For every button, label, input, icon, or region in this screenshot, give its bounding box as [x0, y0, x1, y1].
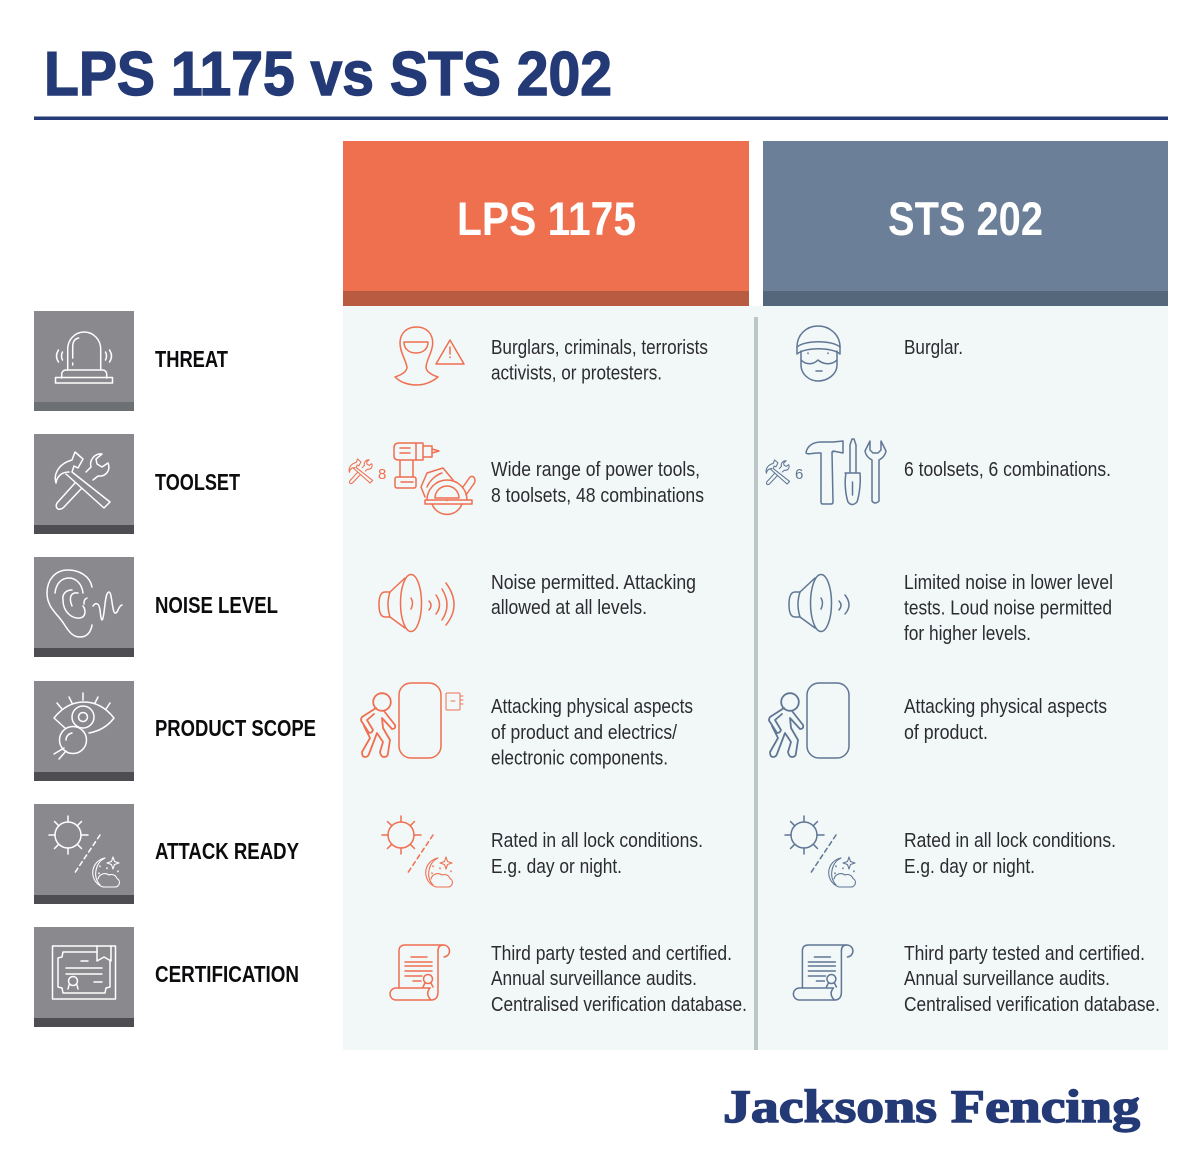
- LPS toolset text: 8 toolsets, 48 combinations: [491, 484, 704, 507]
- LPS certification text: [491, 942, 747, 1016]
- row label: certification: [34, 927, 299, 1027]
- STS certification text: Third party tested and certified.: [904, 942, 1145, 965]
- LPS threat text: activists, or protesters.: [491, 362, 662, 385]
- row label: threat: [34, 311, 228, 411]
- LPS toolset: toolset count icon: 8: [378, 466, 386, 483]
- row label: toolset: [34, 434, 240, 534]
- STS toolset text: 6 toolsets, 6 combinations.: [904, 458, 1111, 481]
- LPS certification text: Centralised verification database.: [491, 993, 747, 1016]
- LPS toolset text: [491, 458, 704, 507]
- icon: ear and sound wave: [47, 570, 122, 637]
- LPS attack ready text: Rated in all lock conditions.: [491, 829, 703, 852]
- LPS certification text: Third party tested and certified.: [491, 942, 732, 965]
- column header: LPS 1175: [343, 141, 749, 306]
- STS noise text: Limited noise in lower level: [904, 571, 1113, 594]
- icon: alarm light: [56, 332, 112, 383]
- column header: STS 202: STS 202: [888, 192, 1043, 245]
- STS toolset: hammer, screwdriver and wrench icons: [806, 439, 886, 504]
- LPS noise: loud speaker icon: [379, 574, 454, 632]
- STS noise text: tests. Loud noise permitted: [904, 597, 1112, 620]
- comparison panel background: [343, 306, 1168, 1050]
- STS noise text: [904, 571, 1113, 645]
- LPS toolset: toolset count icon: [349, 459, 386, 484]
- icon: eye and magnifier: [54, 693, 114, 759]
- STS scope text: of product.: [904, 721, 988, 744]
- row label: product scope: PRODUCT SCOPE: [155, 715, 316, 741]
- icon: certificate: [52, 946, 116, 999]
- row label: attack ready: ATTACK READY: [155, 838, 299, 864]
- LPS scope: person, door and electronics icon: [361, 683, 463, 758]
- column header: STS 202: [763, 141, 1168, 306]
- LPS certification: scroll icon: [390, 945, 450, 1000]
- row label: product scope: [34, 681, 316, 781]
- row label: certification: CERTIFICATION: [155, 961, 299, 987]
- LPS scope text: Attacking physical aspects: [491, 695, 693, 718]
- LPS toolset: drill icon: [394, 443, 439, 488]
- row label: attack ready: [34, 804, 299, 904]
- LPS attack ready: sun and moon icon: [382, 816, 452, 887]
- STS certification text: Annual surveillance audits.: [904, 967, 1110, 990]
- row label: noise level: NOISE LEVEL: [155, 592, 278, 618]
- STS noise text: for higher levels.: [904, 622, 1031, 645]
- STS attack ready text: Rated in all lock conditions.: [904, 829, 1116, 852]
- icon: sun and moon: [49, 816, 119, 887]
- STS attack ready text: [904, 829, 1116, 878]
- column header: LPS 1175: LPS 1175: [457, 192, 636, 245]
- LPS toolset text: Wide range of power tools,: [491, 458, 700, 481]
- LPS noise text: allowed at all levels.: [491, 596, 647, 619]
- STS certification text: Centralised verification database.: [904, 993, 1160, 1016]
- STS attack ready: sun and moon icon: [785, 816, 855, 887]
- LPS noise text: [491, 571, 696, 619]
- row label: threat: THREAT: [155, 346, 228, 372]
- logo: Jacksons Fencing: Jacksons Fencing: [723, 1081, 1141, 1133]
- LPS scope text: electronic components.: [491, 747, 668, 770]
- LPS scope text: [491, 695, 693, 770]
- STS noise: quiet speaker icon: [789, 574, 849, 632]
- STS toolset: toolset count icon: 6: [795, 466, 803, 483]
- STS attack ready text: E.g. day or night.: [904, 855, 1035, 878]
- column divider: [754, 317, 758, 1050]
- STS threat: burglar with goggles icon: [797, 326, 840, 381]
- title rule: [34, 116, 1168, 120]
- STS certification: scroll icon: [793, 945, 853, 1000]
- STS threat text: Burglar.: [904, 336, 963, 359]
- STS scope text: [904, 695, 1107, 744]
- STS toolset: toolset count icon: [766, 460, 803, 485]
- LPS threat text: Burglars, criminals, terrorists: [491, 336, 708, 359]
- row label: noise level: [34, 557, 278, 657]
- LPS threat text: [491, 336, 708, 385]
- LPS toolset: circular saw icon: [421, 468, 475, 514]
- LPS attack ready text: E.g. day or night.: [491, 855, 622, 878]
- icon: hammer and wrench: [55, 452, 110, 509]
- row label: toolset: TOOLSET: [155, 469, 240, 495]
- STS certification text: [904, 942, 1160, 1016]
- LPS certification text: Annual surveillance audits.: [491, 967, 697, 990]
- STS scope text: Attacking physical aspects: [904, 695, 1107, 718]
- LPS noise text: Noise permitted. Attacking: [491, 571, 696, 594]
- LPS scope text: of product and electrics/: [491, 721, 677, 744]
- LPS attack ready text: [491, 829, 703, 878]
- title: LPS 1175 vs STS 202: [44, 40, 612, 109]
- LPS threat: balaclava and warning icon: [395, 327, 464, 385]
- STS scope: person and door icon: [769, 683, 849, 758]
